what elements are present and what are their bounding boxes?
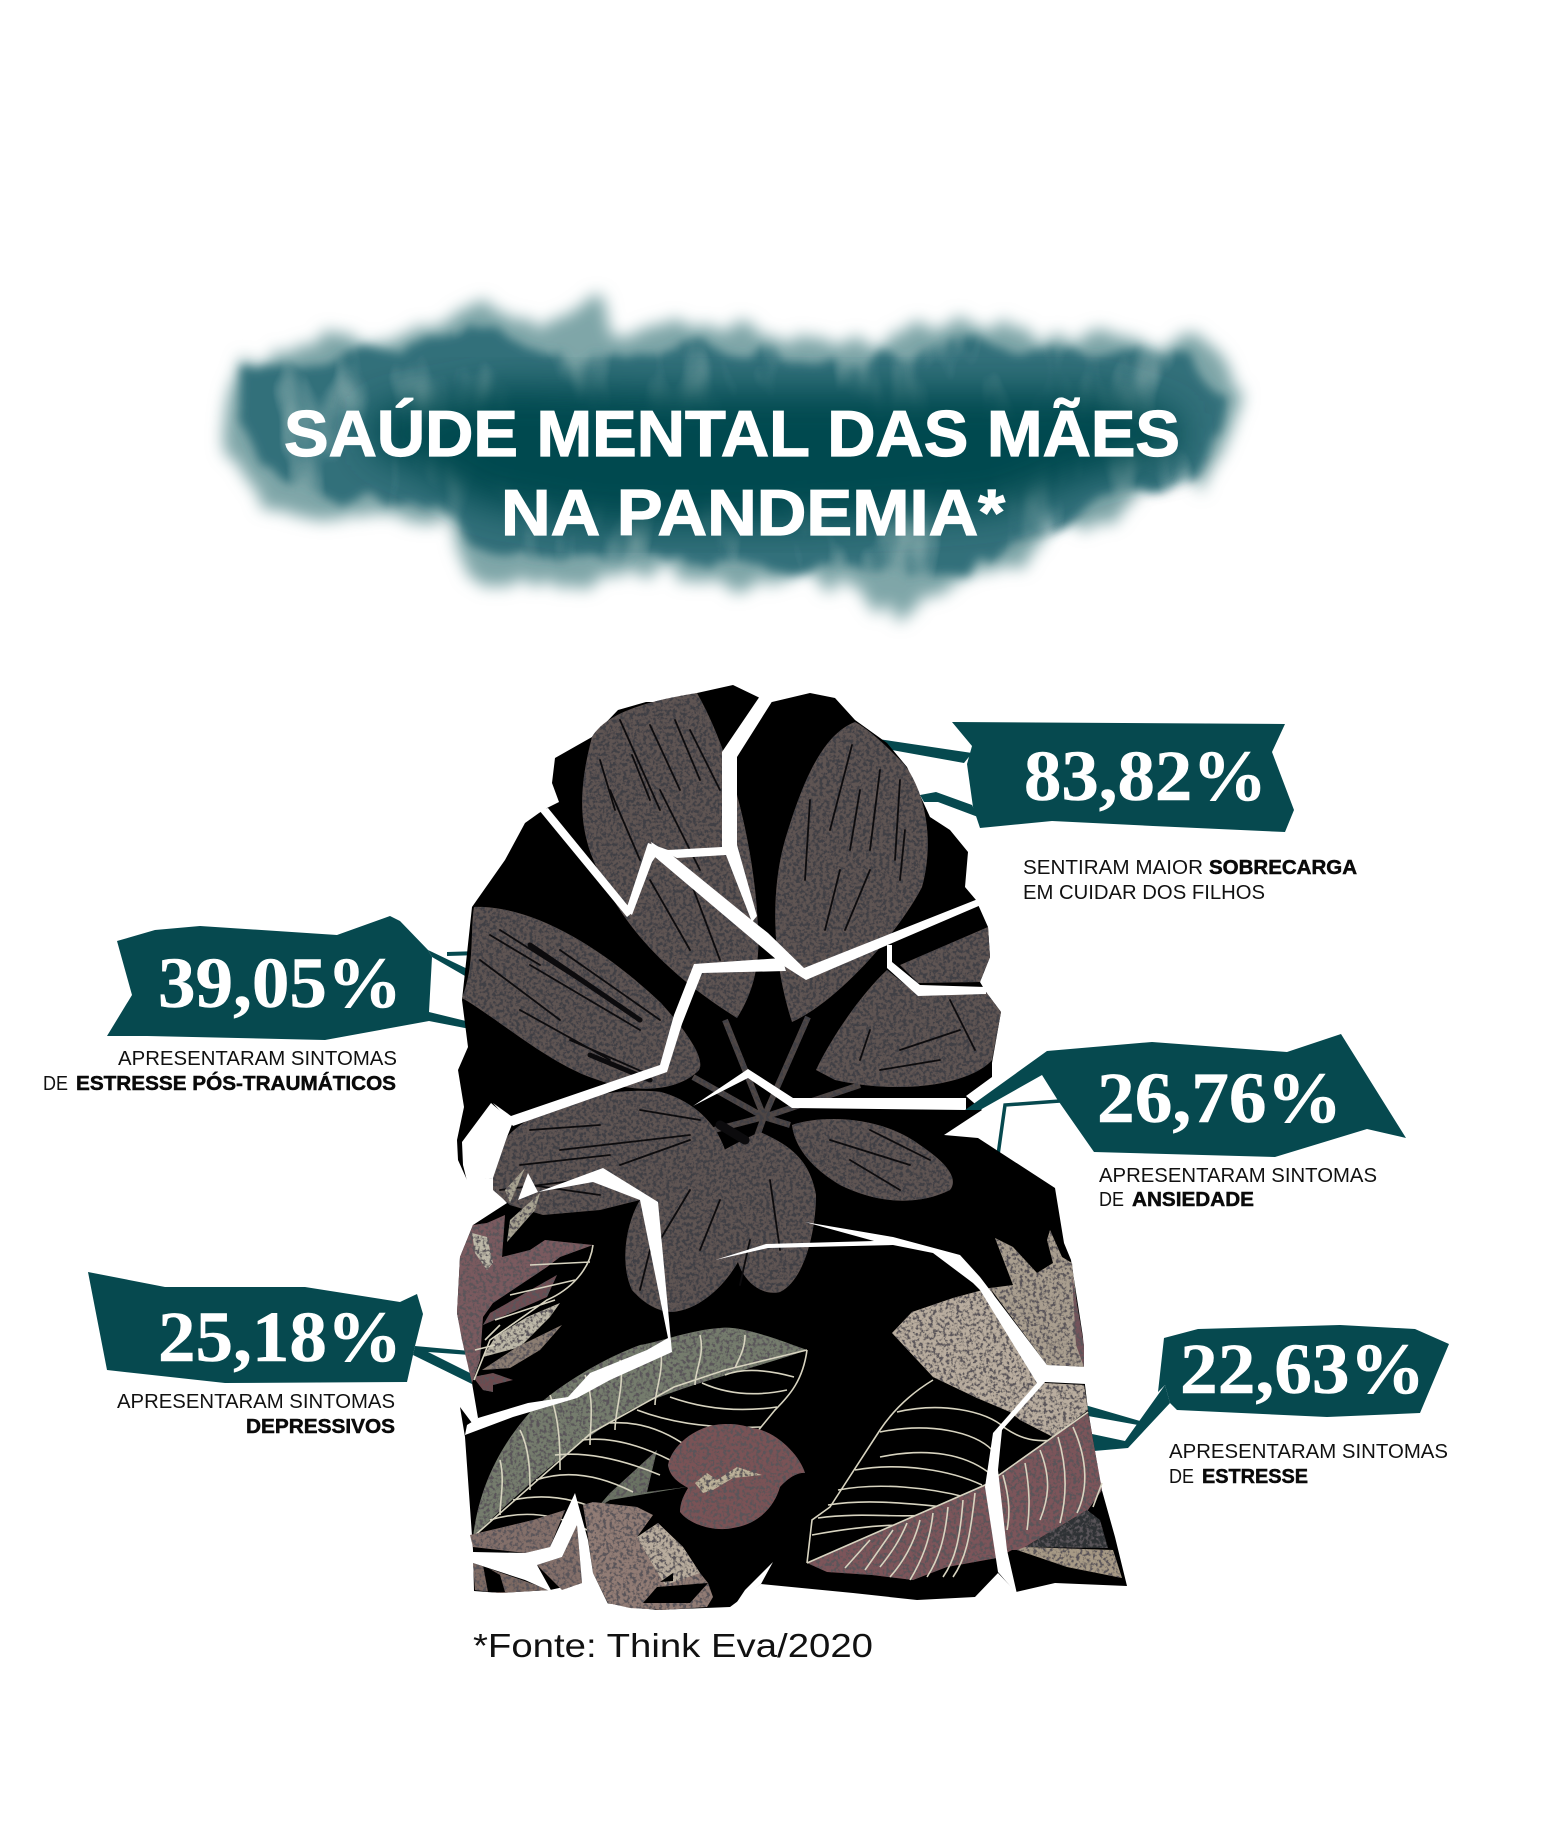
- leaf: right: [816, 970, 1001, 1087]
- lower left plant: [457, 1168, 593, 1392]
- callout connectors behind the figure: [413, 737, 1170, 1451]
- white gap: hair: [462, 1103, 513, 1181]
- callout: 22,63%: [1158, 1325, 1449, 1488]
- crack: right small: [887, 945, 986, 996]
- upper stone leaves: [462, 693, 1001, 1312]
- red heart leaf: [668, 1424, 805, 1529]
- description: [117, 1390, 395, 1438]
- description: [1099, 1164, 1377, 1211]
- title ink blot background: [227, 300, 1234, 610]
- value: 39,05%: [158, 943, 402, 1023]
- callout: 83,82%: [952, 722, 1357, 904]
- crack: head left: [539, 808, 633, 917]
- banner shape: [88, 1272, 423, 1383]
- leaf: top right: [775, 722, 928, 1022]
- callout: 26,76%: [965, 1034, 1406, 1211]
- crack: shoulder: [465, 1168, 672, 1435]
- description: DEPRESSIVOS: [246, 1415, 395, 1438]
- source note: *Fonte: Think Eva/2020: [473, 1627, 873, 1664]
- small black notches: [483, 1565, 708, 1603]
- leaf: left: [462, 907, 700, 1089]
- title: [284, 397, 1180, 549]
- bottom left mottled leaves: [470, 1502, 713, 1610]
- silhouette: [457, 685, 1127, 1610]
- crack: mid left: [493, 958, 786, 1126]
- callout: 39,05%: [43, 916, 432, 1095]
- crack: lower left star: [473, 1493, 608, 1604]
- leaf: lower left horizontal: [493, 1091, 725, 1215]
- description: DE: [43, 1072, 68, 1095]
- value: 25,18%: [158, 1297, 402, 1377]
- description: DE: [1169, 1465, 1194, 1488]
- description: [1169, 1440, 1448, 1488]
- callout: 25,18%: [88, 1272, 423, 1438]
- value: 83,82%: [1024, 736, 1267, 816]
- beige leaflets: [472, 1233, 493, 1270]
- description: EM CUIDAR DOS FILHOS: [1023, 881, 1265, 904]
- white triangle by the plant: [518, 1173, 538, 1200]
- description: ESTRESSE PÓS-TRAUMÁTICOS: [76, 1071, 396, 1095]
- right beige leaves: [892, 1230, 1088, 1437]
- title: SAÚDE MENTAL DAS MÃES: [284, 397, 1180, 470]
- description: SOBRECARGA: [1209, 856, 1357, 879]
- title: NA PANDEMIA*: [501, 476, 1006, 549]
- right veined leaf: [807, 1380, 1053, 1563]
- stems: [693, 1017, 860, 1150]
- value: 22,63%: [1180, 1329, 1425, 1409]
- description: ANSIEDADE: [1132, 1188, 1254, 1211]
- description: SENTIRAM MAIOR: [1023, 856, 1203, 879]
- description: ESTRESSE: [1202, 1465, 1308, 1488]
- description: APRESENTARAM SINTOMAS: [1169, 1440, 1448, 1463]
- crack: face: [693, 1069, 966, 1110]
- description: APRESENTARAM SINTOMAS: [117, 1390, 395, 1413]
- value: 26,76%: [1097, 1058, 1342, 1138]
- crack: bottom notch: [735, 1562, 773, 1605]
- description: APRESENTARAM SINTOMAS: [118, 1047, 397, 1070]
- leaf: top left: [582, 693, 758, 1018]
- crack: head top: [626, 696, 773, 922]
- banner shape: [1158, 1325, 1449, 1417]
- leaf: small right: [900, 927, 990, 983]
- banner shape: [107, 916, 432, 1040]
- pink fern: [457, 1215, 593, 1383]
- description: APRESENTARAM SINTOMAS: [1099, 1164, 1377, 1187]
- banner shape: [965, 1034, 1406, 1157]
- large green leaf: [473, 1328, 807, 1537]
- leaf: lower centre: [625, 1132, 816, 1312]
- description: [1023, 856, 1357, 904]
- mother silhouette figure: [457, 685, 1127, 1610]
- description: DE: [1099, 1188, 1124, 1211]
- white cracks: [462, 696, 1086, 1605]
- banner shape: [952, 722, 1294, 832]
- description: [43, 1047, 397, 1095]
- dark grain scratches on stone leaves: [480, 720, 975, 1290]
- crack: right shoulder: [715, 1222, 1086, 1594]
- leaf: lower right horizontal: [792, 1119, 953, 1201]
- right red leaf: [807, 1412, 1122, 1580]
- crack: head diagonal: [651, 842, 981, 980]
